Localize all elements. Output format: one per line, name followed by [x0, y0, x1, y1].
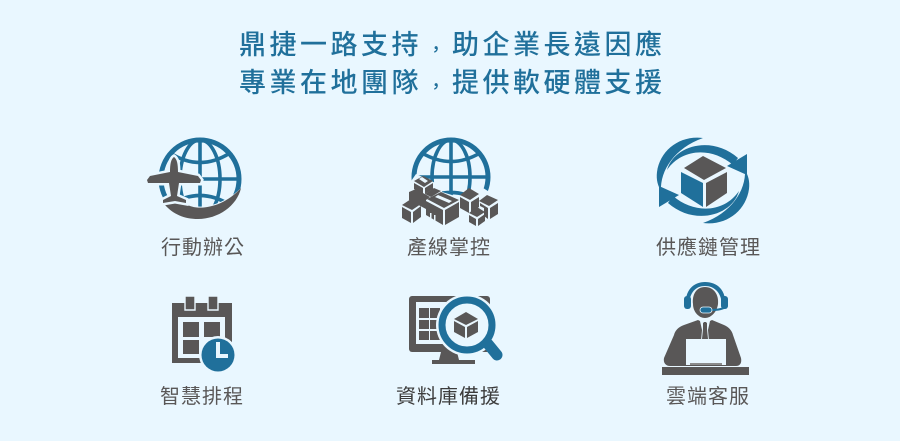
title: 專業在地團隊 [239, 68, 422, 98]
title: 鼎捷一路支持 [239, 30, 422, 60]
arrow: lower cycle arrow [659, 170, 749, 223]
icon: globe with airplane [147, 140, 243, 222]
icon: customer service agent [662, 282, 749, 375]
icon: globe with boxes [398, 140, 502, 226]
title: ， [427, 40, 445, 60]
icon: supply chain cycle [657, 138, 749, 223]
title: 助企業長遠因應 [452, 30, 666, 60]
title [239, 30, 666, 98]
title: 提供軟硬體支援 [452, 68, 666, 98]
label: smart scheduling: 智慧排程 [160, 385, 244, 408]
icon: calendar with clock [172, 296, 237, 374]
label: mobile office: 行動辦公 [161, 236, 245, 259]
label: cloud customer service: 雲端客服 [666, 385, 750, 408]
arrow: upper cycle arrow [657, 138, 747, 191]
label: database backup: 資料庫備援 [396, 385, 501, 408]
label: production line control: 產線掌控 [407, 236, 491, 259]
title: ， [427, 77, 445, 97]
icon: monitor with magnifier [409, 294, 498, 364]
label: supply chain management: 供應鏈管理 [656, 235, 761, 259]
